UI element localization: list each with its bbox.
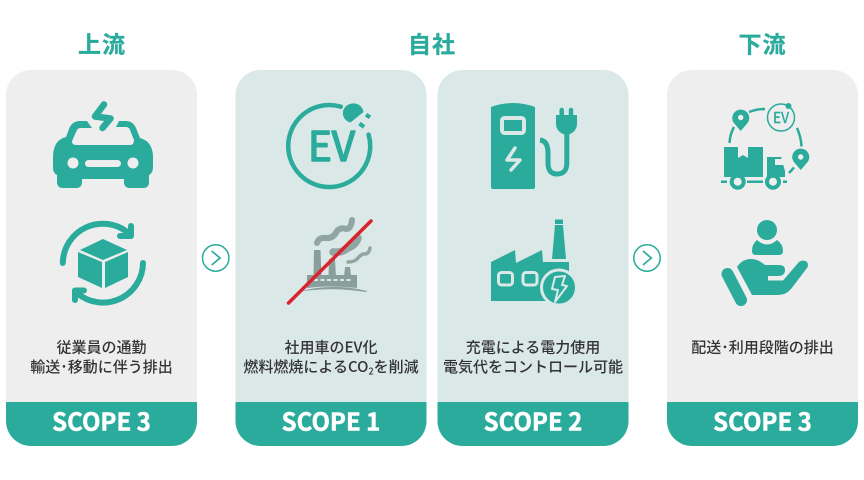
scope band: scope 3 downstream bbox=[667, 402, 858, 446]
description: scope 1: を削減 bbox=[374, 356, 419, 377]
icon: box with cycle arrows bbox=[63, 224, 143, 303]
icon: EV delivery truck route bbox=[721, 103, 809, 188]
heading: upstream: 上流 bbox=[78, 26, 126, 60]
icon: EV delivery truck route: EV bbox=[773, 107, 789, 128]
description: upstream bbox=[30, 336, 173, 377]
panel: upstream scope 3 bbox=[6, 70, 197, 446]
label: scope 3 downstream: SCOPE 3 bbox=[713, 402, 812, 438]
scope band: scope 2 bbox=[438, 402, 628, 446]
description: scope 2: 電気代をコントロール可能 bbox=[443, 356, 623, 377]
description: scope 1: 2 bbox=[368, 364, 374, 378]
icon: crossed out factory emissions bbox=[288, 220, 371, 303]
label: scope 1: SCOPE 1 bbox=[282, 402, 380, 438]
description: upstream: 輸送･移動に伴う排出 bbox=[30, 356, 173, 377]
scope band: scope 3 upstream bbox=[6, 402, 197, 446]
arrow: upstream to company bbox=[202, 245, 229, 271]
panel: company scope 2 bbox=[438, 70, 628, 446]
description: upstream: 従業員の通勤 bbox=[56, 336, 147, 358]
label: scope 3: SCOPE 3 bbox=[52, 402, 151, 438]
panel: company scope 1 bbox=[236, 70, 426, 446]
icon: charging station bbox=[491, 103, 577, 189]
description: scope 1: 社用車のEV化 bbox=[285, 336, 377, 358]
icon: electric car bbox=[53, 104, 153, 188]
heading: downstream: 下流 bbox=[738, 26, 786, 60]
icon: factory with electricity bbox=[491, 220, 576, 305]
arrow: company to downstream bbox=[634, 245, 660, 271]
description: scope 1 bbox=[243, 336, 419, 378]
scope band: scope 1 bbox=[236, 402, 426, 446]
description: downstream: 配送･利用段階の排出 bbox=[691, 336, 834, 358]
icon: EV circle with plug bbox=[288, 103, 370, 187]
panel: downstream scope 3 bbox=[667, 70, 858, 446]
label: scope 2: SCOPE 2 bbox=[484, 402, 582, 438]
description: scope 2 bbox=[443, 336, 623, 377]
icon: EV circle with plug: EV bbox=[308, 113, 355, 173]
heading: own company: 自社 bbox=[408, 26, 456, 60]
description: scope 2: 充電による電力使用 bbox=[466, 336, 600, 358]
icon: person on open hand bbox=[728, 220, 808, 300]
description: scope 1: 燃料燃焼によるCO bbox=[243, 356, 368, 377]
